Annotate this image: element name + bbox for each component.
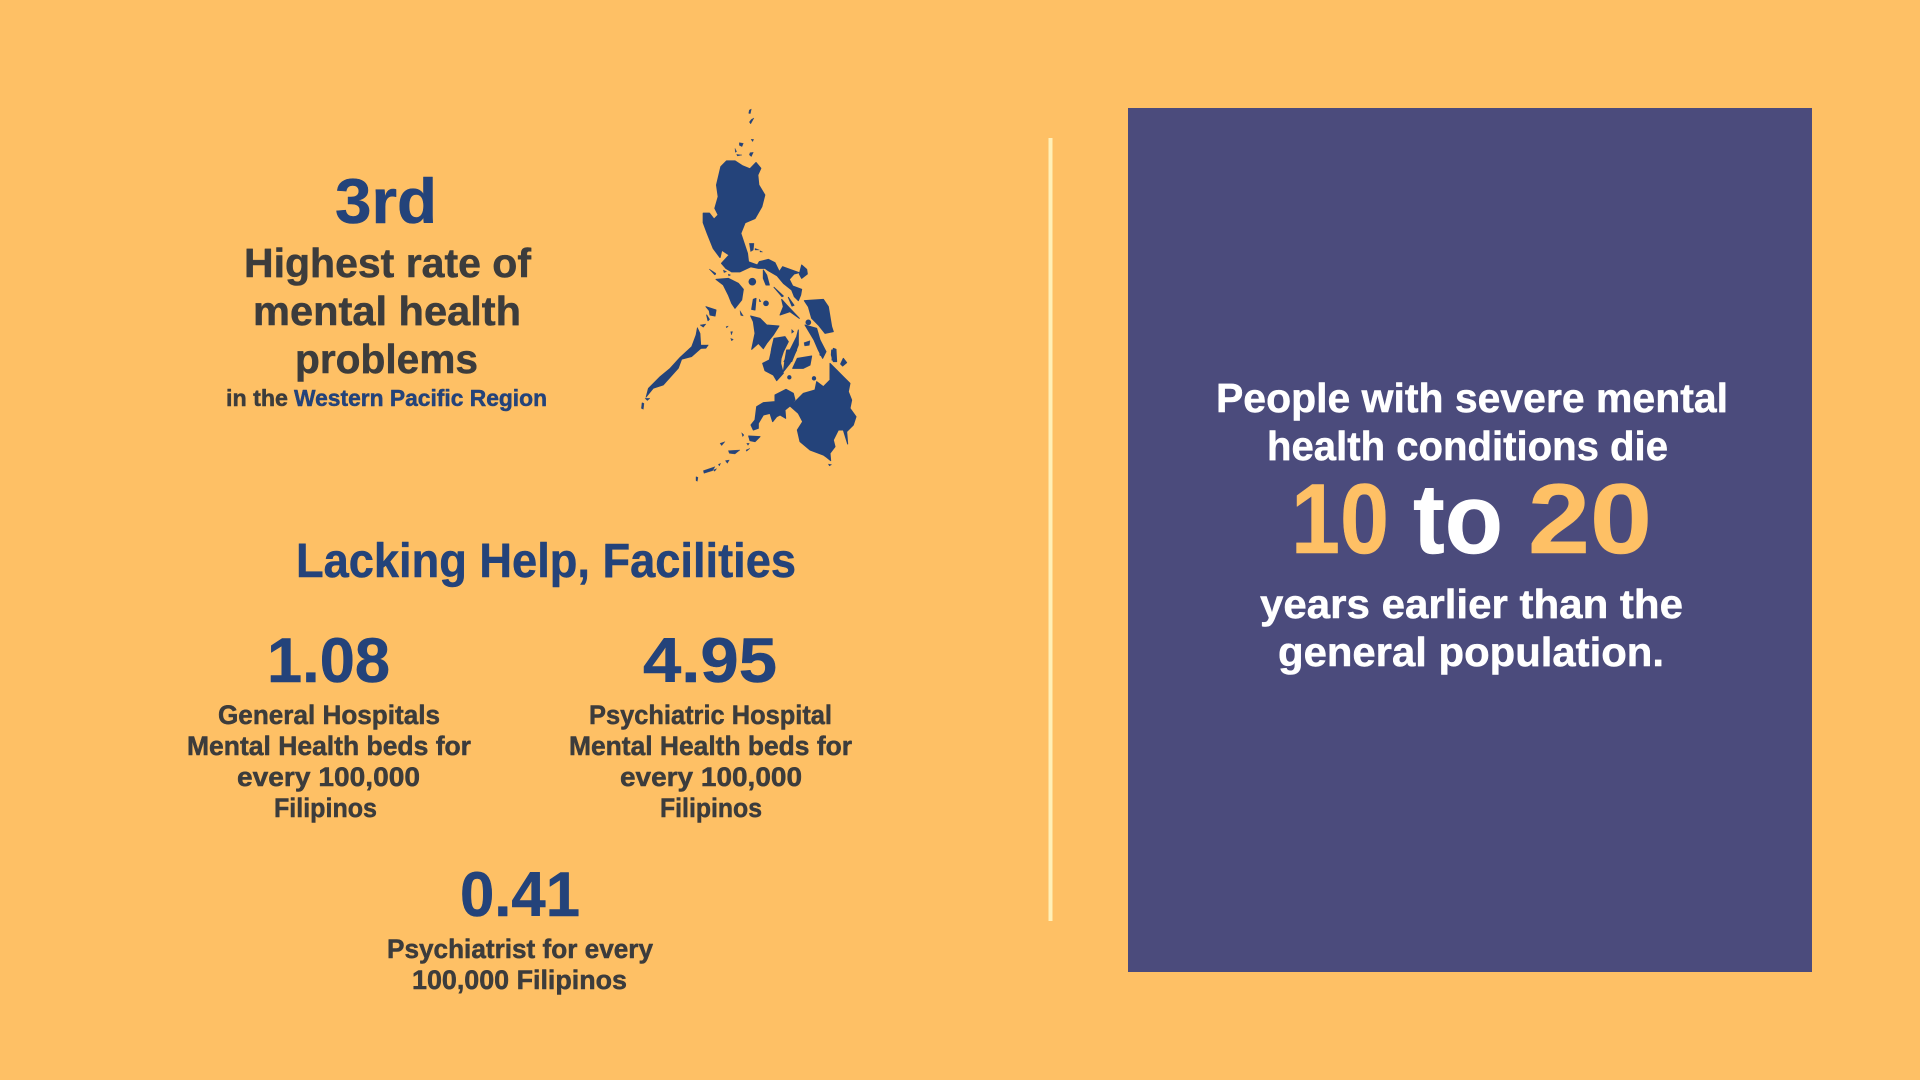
text block: years earlier than the general population: general population.: [1278, 629, 1664, 675]
big numbers: 10 to 20: 10: [1291, 463, 1389, 574]
stat: 4.95 psychiatric hospital beds: 4.95: [643, 626, 777, 696]
stat: 0.41 psychiatrists: 0.41: [460, 860, 580, 930]
text block: years earlier than the general population: [1260, 581, 1683, 675]
text block: in the Western Pacific Region: in the: [226, 385, 288, 411]
stat: 4.95 psychiatric hospital beds: Psychiatric Hospital: [589, 700, 832, 730]
big numbers: 10 to 20: to: [1413, 463, 1503, 574]
heading: 3rd: 3rd: [335, 167, 437, 237]
text block: highest rate of mental health problems: [244, 240, 531, 382]
stat: 1.08 general hospital beds: General Hospitals: [218, 700, 440, 730]
text block: years earlier than the general population: years earlier than the: [1260, 581, 1683, 627]
text block: highest rate of mental health problems: Highest rate of: [244, 240, 531, 286]
stat: 1.08 general hospital beds: [187, 626, 471, 823]
stat: 1.08 general hospital beds: 1.08: [267, 626, 390, 696]
stat: 4.95 psychiatric hospital beds: Mental Health beds for: [569, 731, 852, 761]
text block: highest rate of mental health problems: mental health: [253, 288, 521, 334]
stat: 4.95 psychiatric hospital beds: [569, 626, 852, 823]
stat: 0.41 psychiatrists: 100,000 Filipinos: [412, 965, 627, 995]
panel: early death callout: [1128, 108, 1812, 972]
stat: 1.08 general hospital beds: Filipinos: [274, 793, 377, 823]
text block: people with severe mental health conditions die: [1216, 375, 1728, 469]
stat: 0.41 psychiatrists: Psychiatrist for every: [387, 934, 653, 964]
big numbers: 10 to 20: [1291, 463, 1652, 574]
heading: Lacking Help, Facilities: Lacking Help, Facilities: [296, 535, 796, 588]
text block: highest rate of mental health problems: problems: [295, 336, 478, 382]
text block: people with severe mental health conditions die: People with severe mental: [1216, 375, 1728, 421]
text block: people with severe mental health conditions die: health conditions die: [1267, 423, 1668, 469]
stat: 4.95 psychiatric hospital beds: every 100,000: [620, 762, 802, 792]
map: Philippines: [641, 109, 856, 481]
text block: in the Western Pacific Region: Western Pacific Region: [294, 385, 547, 411]
big numbers: 10 to 20: 20: [1528, 463, 1652, 574]
stat: 0.41 psychiatrists: [387, 860, 653, 995]
stat: 4.95 psychiatric hospital beds: Filipinos: [660, 793, 762, 823]
stat: 1.08 general hospital beds: every 100,000: [237, 762, 420, 792]
stat: 1.08 general hospital beds: Mental Health beds for: [187, 731, 471, 761]
